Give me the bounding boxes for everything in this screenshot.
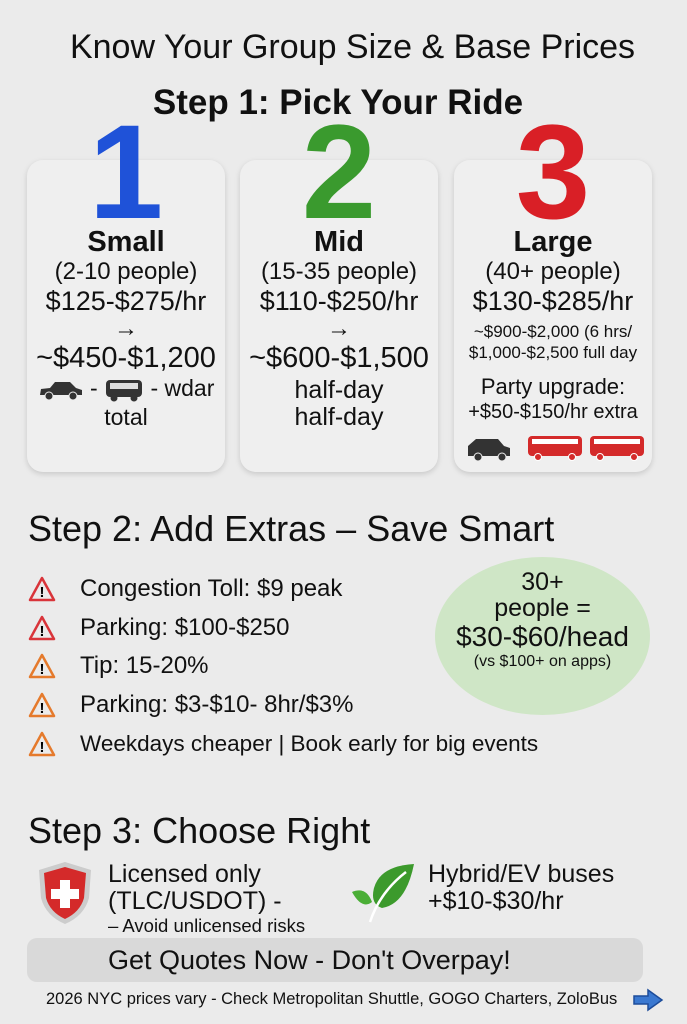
icon: arrow bbox=[633, 988, 664, 1012]
card: large: Party upgrade: bbox=[481, 374, 625, 399]
list: extras: ! bbox=[40, 623, 44, 640]
card: mid: half-day bbox=[295, 403, 383, 431]
card: small bbox=[27, 160, 225, 472]
heading: step 1: Step 1: Pick Your Ride bbox=[153, 83, 523, 122]
text: hybrid: Hybrid/EV buses bbox=[428, 860, 614, 888]
footer: 2026 NYC prices vary - Check Metropolitan Shuttle, GOGO Charters, ZoloBus bbox=[46, 990, 617, 1008]
card: small: $125-$275/hr bbox=[46, 286, 206, 316]
card: small: (2-10 people) bbox=[55, 258, 197, 285]
list: extras: Weekdays cheaper | Book early for big events bbox=[80, 731, 538, 756]
list: extras: ! bbox=[40, 661, 44, 678]
heading: step 3: Step 3: Choose Right bbox=[28, 810, 370, 851]
card: small: ~$450-$1,200 bbox=[36, 342, 216, 374]
list: extras: Parking: $100-$250 bbox=[80, 614, 289, 641]
card: large bbox=[454, 160, 652, 472]
text: licensed: – Avoid unlicensed risks bbox=[108, 915, 305, 936]
callout: group savings: 30+ bbox=[521, 568, 564, 596]
callout: group savings: (vs $100+ on apps) bbox=[474, 653, 611, 670]
callout: group savings bbox=[435, 557, 650, 715]
card: large: (40+ people) bbox=[485, 258, 621, 285]
card: mid: → bbox=[327, 315, 351, 342]
card: mid: ~$600-$1,500 bbox=[249, 342, 429, 374]
number 3: 3 bbox=[516, 98, 590, 247]
banner: cta bbox=[27, 938, 643, 982]
card: mid bbox=[240, 160, 438, 472]
list: extras: Tip: 15-20% bbox=[80, 652, 209, 679]
card: mid: $110-$250/hr bbox=[260, 286, 418, 316]
callout: group savings: $30-$60/head bbox=[456, 621, 629, 652]
list: extras: ! bbox=[40, 739, 44, 756]
icons: vehicles bbox=[468, 436, 644, 461]
card: large: $130-$285/hr bbox=[473, 286, 633, 316]
card: large: $1,000-$2,500 full day bbox=[469, 343, 637, 362]
list: extras bbox=[28, 575, 538, 756]
card: large: ~$900-$2,000 (6 hrs/ bbox=[474, 322, 632, 341]
text: hybrid bbox=[428, 860, 614, 915]
banner: cta: Get Quotes Now - Don't Overpay! bbox=[108, 945, 511, 975]
text: hybrid: +$10-$30/hr bbox=[428, 887, 564, 915]
text: licensed: (TLC/USDOT) - bbox=[108, 887, 282, 915]
text: licensed: Licensed only bbox=[108, 860, 261, 888]
number 1: 1 bbox=[89, 98, 163, 247]
icon: shield bbox=[39, 862, 91, 924]
icon: leaf bbox=[352, 864, 414, 922]
number 2: 2 bbox=[302, 98, 376, 247]
card: large: Large bbox=[514, 226, 592, 258]
card: mid: half-day bbox=[295, 376, 383, 404]
card: small: Small bbox=[87, 226, 165, 258]
heading: step 2: Step 2: Add Extras – Save Smart bbox=[28, 508, 554, 549]
list: extras: Parking: $3-$10- 8hr/$3% bbox=[80, 691, 354, 718]
card: small: total bbox=[104, 404, 148, 430]
card: large: +$50-$150/hr extra bbox=[468, 401, 638, 423]
callout: group savings: people = bbox=[494, 594, 591, 622]
card: mid: Mid bbox=[314, 226, 364, 258]
card: small: → bbox=[114, 315, 138, 342]
card: mid: (15-35 people) bbox=[261, 258, 417, 285]
card: small: - - wdar bbox=[90, 375, 214, 401]
list: extras: ! bbox=[40, 584, 44, 601]
title: Know Your Group Size & Base Prices bbox=[70, 28, 635, 66]
list: extras: ! bbox=[40, 700, 44, 717]
text: licensed bbox=[108, 860, 305, 936]
list: extras: Congestion Toll: $9 peak bbox=[80, 575, 342, 602]
